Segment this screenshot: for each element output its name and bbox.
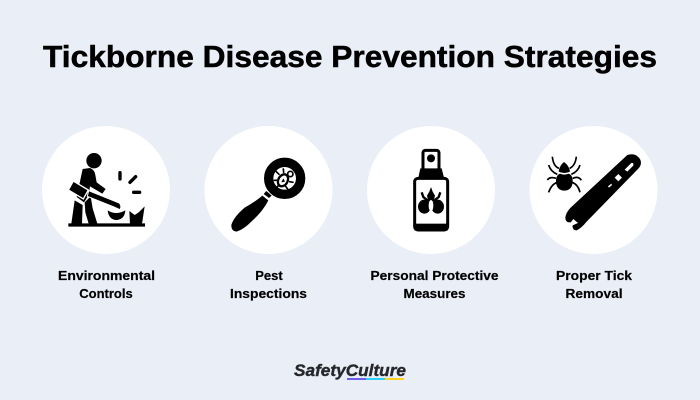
- panel: personal protective measures: [367, 126, 498, 301]
- label: Proper Tick: [556, 268, 633, 283]
- label: Controls: [79, 286, 133, 301]
- circle background: [204, 126, 332, 254]
- icon: magnifying glass with bug: [231, 162, 301, 232]
- icon: repellent spray bottle: [415, 150, 448, 230]
- label: Environmental: [58, 268, 155, 283]
- panel: pest inspections: [204, 126, 332, 301]
- circle background: [367, 126, 495, 254]
- icon: person digging: [68, 153, 145, 227]
- label: Measures: [404, 286, 466, 301]
- label: Personal Protective: [370, 268, 498, 283]
- title: Tickborne Disease Prevention Strategies: [43, 39, 657, 74]
- panel: environmental controls: [42, 126, 170, 301]
- circle background: [42, 126, 170, 254]
- label: Removal: [566, 286, 622, 301]
- circle background: [530, 126, 658, 254]
- panel: proper tick removal: [530, 126, 658, 301]
- logo: SafetyCulture: SafetyCulture: [294, 361, 406, 380]
- label: Inspections: [230, 286, 307, 301]
- icon: tick: [547, 157, 581, 192]
- label: Pest: [255, 268, 283, 283]
- icon: tweezers: [565, 154, 641, 230]
